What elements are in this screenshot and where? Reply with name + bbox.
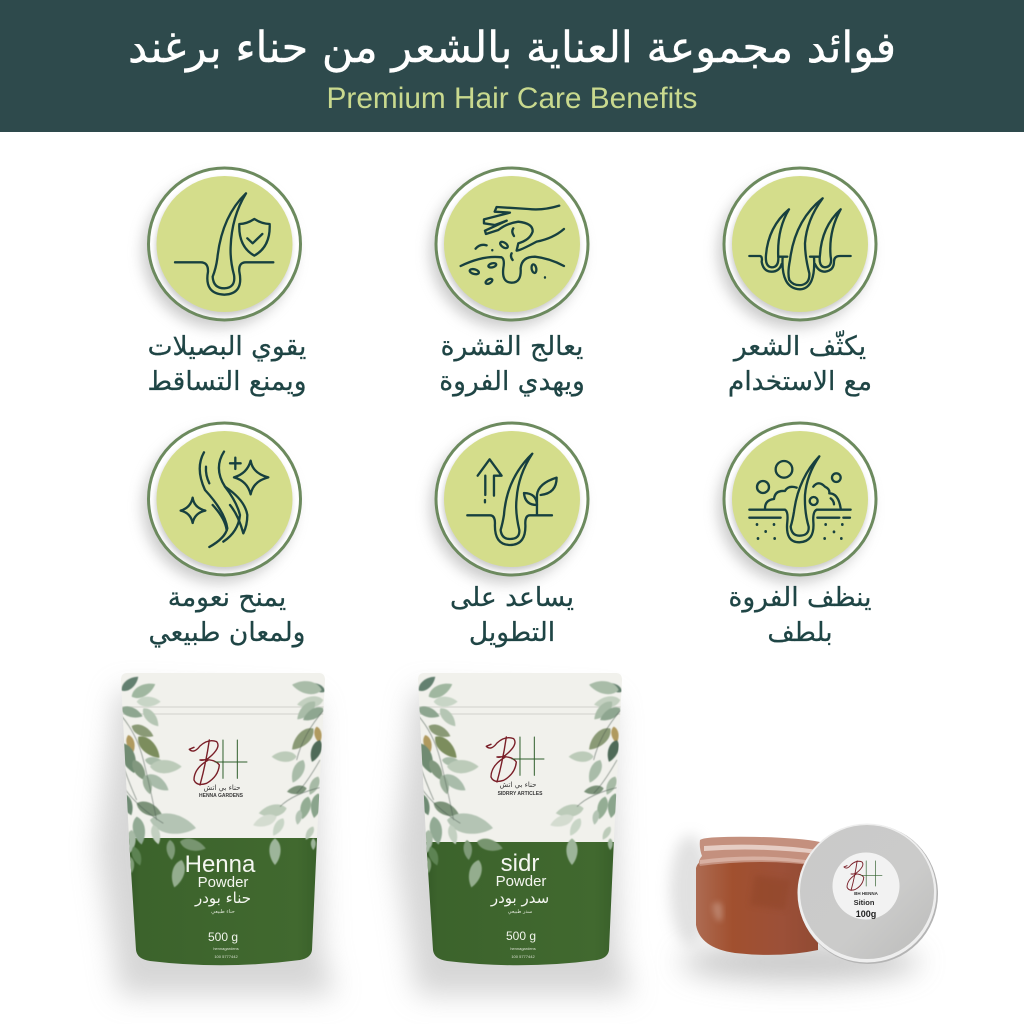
badge: [718, 423, 876, 583]
icon: hair follicle with shield: [175, 193, 273, 295]
product: sidr powder pouch: hennagardens: [510, 946, 536, 951]
label: [148, 331, 306, 397]
subtitle: Premium Hair Care Benefits: [327, 82, 697, 115]
label: التطويل: [469, 617, 555, 648]
label: [149, 582, 305, 648]
label: يقوي البصيلات: [148, 331, 306, 362]
badge: [718, 168, 876, 328]
label: [728, 582, 872, 648]
label: بلطف: [767, 617, 833, 648]
label: [439, 331, 585, 397]
product: jar with silver lid: 100g: [856, 909, 876, 919]
product: sidr powder pouch: سدر بودر: [490, 889, 549, 907]
product: henna powder pouch: HENNA GARDENS: [199, 793, 244, 799]
logo: BH: [189, 740, 247, 785]
product: jar with silver lid: Sition: [854, 898, 875, 907]
icon: flowing hair with sparkles: [181, 452, 268, 547]
product name: sidr: [501, 850, 539, 877]
product: sidr powder pouch: [395, 670, 632, 995]
icon: growing hair with arrow and sprout: [467, 454, 557, 545]
panel: strengthens follicles: [142, 168, 306, 397]
product: henna powder pouch: حناء بي اتش: [204, 784, 240, 792]
label: يمنح نعومة: [168, 582, 286, 613]
label: ينظف الفروة: [728, 582, 872, 613]
product: jar with silver lid: [670, 824, 938, 982]
lid label: [832, 852, 900, 920]
label: مع الاستخدام: [728, 366, 872, 397]
weight: 500 g: [208, 930, 238, 944]
panel: helps growth: [430, 423, 588, 648]
product: henna powder pouch: hennagardens: [213, 946, 239, 951]
product: sidr powder pouch: Powder: [496, 873, 546, 890]
badge: [430, 423, 588, 583]
weight: 500 g: [506, 929, 536, 943]
title: فوائد مجموعة العناية بالشعر من حناء برغند: [128, 23, 896, 73]
jar body: [696, 862, 818, 955]
product: henna powder pouch: [98, 670, 335, 995]
product: sidr powder pouch: حناء بي اتش: [500, 781, 536, 789]
label: ويمنع التساقط: [148, 366, 306, 397]
product: jar with silver lid: BH HENNA: [854, 891, 879, 896]
product name: Henna: [185, 851, 256, 878]
product: henna powder pouch: حناء طبيعي: [211, 909, 235, 915]
label: يكثّف الشعر: [732, 331, 866, 362]
label: [450, 582, 574, 648]
panel: softness and shine: [142, 423, 305, 648]
panel: gently cleanses scalp: [718, 423, 876, 648]
product: henna powder pouch: حناء بودر: [194, 889, 251, 907]
product: sidr powder pouch: سدر طبيعي: [508, 909, 532, 915]
panel: thickens hair: [718, 168, 876, 397]
product: sidr powder pouch: 100 5777442: [511, 954, 535, 959]
product: henna powder pouch: Powder: [198, 874, 248, 891]
label: ويهدي الفروة: [439, 366, 585, 397]
product: henna powder pouch: 100 5777442: [214, 954, 238, 959]
icon: hand and scalp flakes: [461, 206, 564, 285]
label: يعالج القشرة: [441, 331, 583, 362]
icon: three hair strands: [749, 198, 851, 289]
product: sidr powder pouch: SIDRRY ARTICLES: [498, 791, 543, 797]
header banner: [0, 0, 1024, 132]
badge: [430, 168, 588, 328]
lid: [798, 824, 938, 964]
label: يساعد على: [450, 582, 574, 613]
label: ولمعان طبيعي: [149, 617, 305, 648]
panel: treats dandruff: [430, 168, 588, 397]
label: [728, 331, 872, 397]
badge: [142, 168, 300, 328]
logo: BH: [486, 737, 544, 782]
badge: [142, 423, 300, 583]
icon: scalp with foam bubbles: [749, 456, 851, 542]
